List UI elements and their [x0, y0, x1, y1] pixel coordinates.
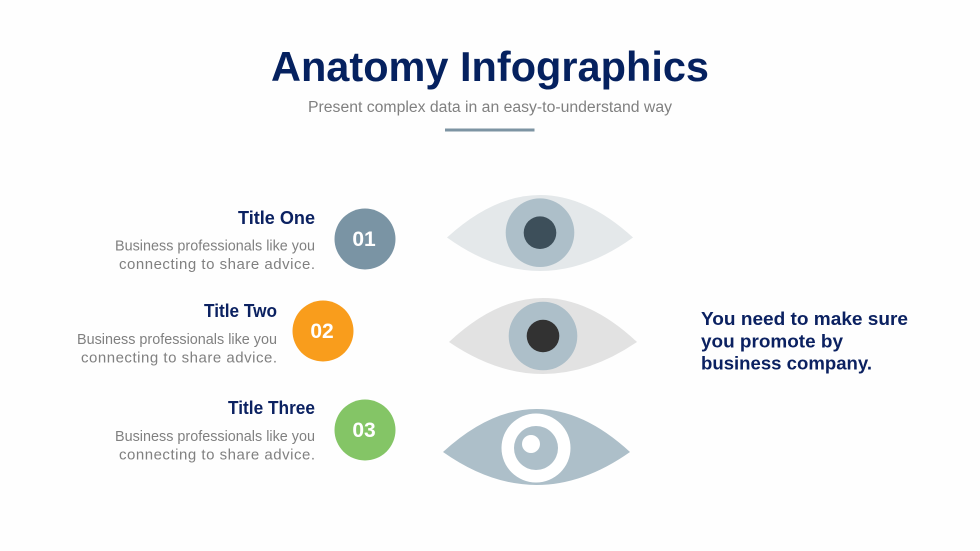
description 3: Business professionals like you [115, 428, 315, 445]
description 2 [77, 331, 277, 366]
item 2: text and number badge [77, 300, 354, 366]
item 3: text and number badge [115, 398, 396, 464]
description 1: Business professionals like you [115, 238, 315, 254]
callout text: you promote by [701, 330, 844, 352]
subtitle: Present complex data in an easy-to-understand way [308, 99, 672, 116]
heading: Title Two: Title Two [204, 301, 277, 321]
badge 03: 03 [352, 419, 376, 442]
description 3 [115, 428, 315, 464]
heading: Title Three: Title Three [228, 398, 315, 418]
callout text: You need to make sure [701, 308, 908, 329]
description 1: connecting to share advice. [119, 256, 315, 273]
badge 03 [334, 400, 396, 460]
description 3: connecting to share advice. [119, 446, 315, 464]
description 1 [115, 238, 315, 273]
description 2: connecting to share advice. [81, 350, 277, 366]
item 1: text and number badge [115, 208, 396, 273]
badge 01 [334, 208, 396, 270]
callout text [701, 308, 908, 374]
icon: eye 3 [443, 409, 630, 485]
heading: Title One: Title One [238, 208, 315, 228]
title: Anatomy Infographics [271, 43, 709, 90]
badge 02 [292, 300, 354, 362]
callout text: business company. [701, 352, 872, 374]
badge 01: 01 [352, 228, 376, 251]
title underline [445, 128, 534, 132]
icon: eye 1 [447, 195, 633, 271]
description 2: Business professionals like you [77, 331, 277, 348]
icon: eye 2 [449, 298, 637, 374]
badge 02: 02 [310, 320, 334, 343]
